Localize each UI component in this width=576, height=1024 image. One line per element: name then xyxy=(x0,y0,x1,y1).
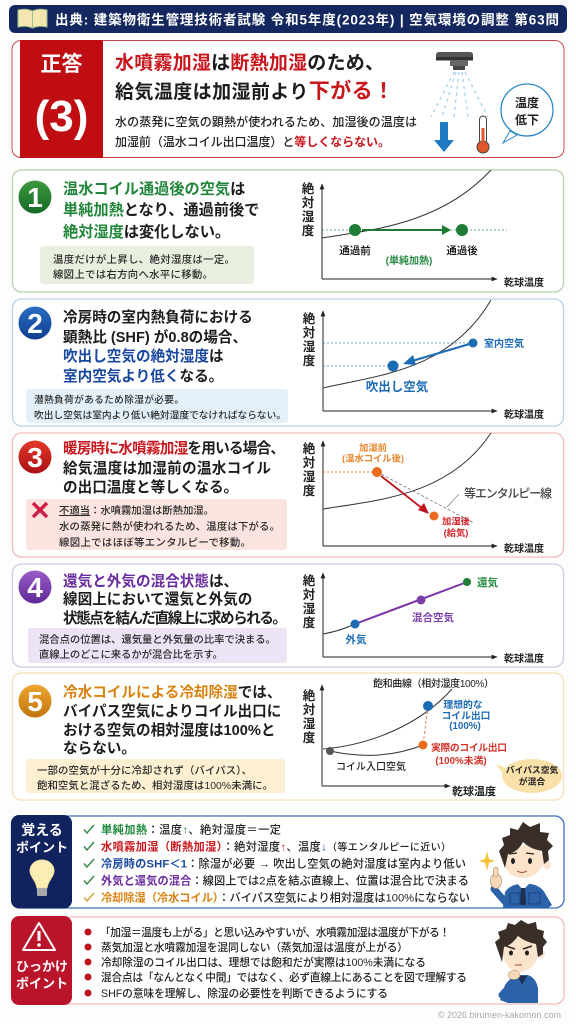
memo checklist: 外気と還気の混合：線図上では2点を結ぶ直線上、位置は混合比で決まる xyxy=(101,874,469,888)
panel 4: mixing xyxy=(12,564,564,667)
chart 5: 乾球温度 xyxy=(452,784,496,798)
number badge 1 xyxy=(18,180,52,214)
panel 5: cooling dehumidification xyxy=(12,673,564,800)
note 4: 直線上のどこに来るかが混合比を示す。 xyxy=(39,648,223,661)
number badge 1: 1 xyxy=(27,182,43,213)
note 1: 温度だけが上昇し、絶対湿度は一定。 xyxy=(53,253,235,266)
panel 3: water spray humidification xyxy=(12,433,564,557)
chart 1: (単純加熱) xyxy=(386,254,432,267)
statement 3: の出口温度と等しくなる。 xyxy=(63,478,238,496)
header bar: source xyxy=(9,5,567,33)
icon: thermometer xyxy=(477,116,489,153)
chart 4: 還気 xyxy=(477,576,498,589)
chart 4: 度 xyxy=(303,615,316,630)
note 5 xyxy=(26,759,285,793)
note 2: 潜熱負荷があるため除湿が必要。 xyxy=(34,393,184,406)
number badge 3 xyxy=(18,440,52,474)
icon: open book xyxy=(18,9,47,28)
chart 3: 絶 xyxy=(303,441,316,456)
chart 2: 対 xyxy=(303,325,316,340)
chart 3: 加湿後 xyxy=(442,516,471,526)
answer headline: 給気温度は加湿前より下がる！ xyxy=(115,79,394,103)
answer explanation xyxy=(115,114,417,149)
trap list xyxy=(84,926,467,1000)
number badge 5 xyxy=(18,684,52,718)
chart 3 xyxy=(303,433,552,555)
statement 2: 顕熱比 (SHF) が0.8の場合、 xyxy=(63,328,247,346)
note 2: 吹出し空気は室内より低い絶対湿度でなければならない。 xyxy=(34,408,286,422)
icon: spray nozzle xyxy=(431,52,488,152)
statement 4: 線図上において還気と外気の xyxy=(63,590,252,608)
callout: bypass air: が混合 xyxy=(519,776,545,786)
character: thumbs-up worker xyxy=(490,822,553,908)
chart 3: 加湿前 xyxy=(359,442,387,453)
statement 1: 温水コイル通過後の空気は xyxy=(63,180,245,198)
panel: answer xyxy=(12,40,564,158)
note 5: 一部の空気が十分に冷却されず（バイパス）、 xyxy=(37,764,252,777)
panel 1: simple heating xyxy=(12,170,564,292)
callout: temperature drop: 低下 xyxy=(515,112,539,127)
chart 5: コイル入口空気 xyxy=(336,760,406,773)
chart 2: 度 xyxy=(303,353,316,368)
note 4 xyxy=(28,628,287,663)
chart 3: (温水コイル後) xyxy=(342,452,404,464)
statement 2: 吹出し空気の絶対湿度は xyxy=(63,347,224,365)
character: thinking worker xyxy=(495,920,547,1003)
memo label: ポイント xyxy=(16,840,68,855)
statement 2 xyxy=(63,308,253,385)
statement 5: 冷水コイルによる冷却除湿では、 xyxy=(63,684,282,701)
number badge 2: 2 xyxy=(27,308,43,339)
answer explanation: 水の蒸発に空気の顕熱が使われるため、加湿後の温度は xyxy=(115,114,417,129)
chart 2: 絶 xyxy=(303,311,316,326)
statement 5: バイパス空気によりコイル出口に xyxy=(63,702,281,720)
note 3: 不適当：水噴霧加湿は断熱加湿。 xyxy=(59,504,214,517)
trap list: 蒸気加湿と水噴霧加湿を混同しない（蒸気加湿は温度が上がる） xyxy=(101,941,408,954)
chart 1: 湿 xyxy=(302,209,315,224)
note 1 xyxy=(40,246,254,284)
statement 4 xyxy=(63,572,287,627)
memo checklist: 水噴霧加湿（断熱加湿）：絶対湿度↑、温度↓（等エンタルピーに近い） xyxy=(101,840,451,854)
icon: warning triangle xyxy=(23,923,55,950)
trap label xyxy=(11,916,72,1005)
panel: trap points xyxy=(11,916,564,1005)
callout: temperature drop: 温度 xyxy=(515,95,539,110)
answer headline: 水噴霧加湿は断熱加湿のため、 xyxy=(115,52,384,74)
callout: bypass air: バイパス空気 xyxy=(506,764,559,775)
chart 1: 対 xyxy=(302,195,315,210)
answer badge xyxy=(20,40,103,158)
chart 5: (100%未満) xyxy=(435,754,487,767)
panel 2: SHF xyxy=(12,299,564,426)
panel: points to remember xyxy=(11,815,564,908)
callout: temperature drop xyxy=(501,84,553,143)
number badge 4 xyxy=(18,570,52,604)
answer explanation: 加湿前（温水コイル出口温度）と等しくならない。 xyxy=(115,134,390,149)
chart 3: 湿 xyxy=(303,469,316,484)
chart 1: 通過前 xyxy=(339,244,371,257)
statement 5: ならない。 xyxy=(63,740,136,757)
chart 5 xyxy=(303,677,562,798)
icon: light bulb xyxy=(30,860,54,896)
note 3 xyxy=(26,499,287,550)
chart 5: 対 xyxy=(303,702,316,717)
trap label: ひっかけ xyxy=(16,959,68,974)
chart 3: 等エンタルピー線 xyxy=(464,486,552,500)
icon: cross xyxy=(33,503,47,517)
chart 1 xyxy=(302,170,544,289)
chart 5: 飽和曲線（相対湿度100%） xyxy=(373,677,494,690)
statement 2: 冷房時の室内熱負荷における xyxy=(63,308,253,326)
trap list: 冷却除湿のコイル出口は、理想では飽和だが実際は100%未満になる xyxy=(101,956,426,969)
number badge 3: 3 xyxy=(27,442,43,473)
header text: 出典: 建築物衛生管理技術者試験 令和5年度(2023年) | 空気環境の調整 第63問 xyxy=(55,12,559,28)
chart 5: 実際のコイル出口 xyxy=(431,741,507,754)
statement 3 xyxy=(63,439,285,496)
statement 2: 室内空気より低くなる。 xyxy=(63,367,223,385)
chart 3: 度 xyxy=(303,483,316,498)
chart 1: 乾球温度 xyxy=(504,276,544,289)
copyright: © 2026 birumen-kakomon.com xyxy=(438,1010,561,1020)
callout: bypass air xyxy=(496,759,562,793)
statement 3: 給気温度は加湿前の温水コイル xyxy=(63,459,271,477)
memo checklist xyxy=(84,822,470,904)
trap list: 「加湿＝温度も上がる」と思い込みやすいが、水噴霧加湿は温度が下がる！ xyxy=(100,926,450,939)
chart 4: 混合空気 xyxy=(412,611,454,624)
trap label: ポイント xyxy=(16,976,68,991)
chart 4: 対 xyxy=(303,587,316,602)
chart 5: 理想的な xyxy=(443,698,483,711)
number badge 5: 5 xyxy=(27,686,43,717)
chart 1: 絶 xyxy=(302,181,315,196)
memo checklist: 冷却除湿（冷水コイル）：バイパス空気により相対湿度は100%にならない xyxy=(101,890,470,904)
note 1: 線図上では右方向へ水平に移動。 xyxy=(53,268,213,281)
statement 1 xyxy=(63,180,259,241)
chart 2: 乾球温度 xyxy=(504,408,544,421)
statement 4: 状態点を結んだ直線上に求められる。 xyxy=(63,609,287,627)
chart 4: 外気 xyxy=(346,633,367,646)
chart 5: 絶 xyxy=(303,688,316,703)
chart 2 xyxy=(303,300,544,421)
statement 3: 暖房時に水噴霧加湿を用いる場合、 xyxy=(63,439,285,457)
chart 2: 湿 xyxy=(303,339,316,354)
statement 4: 還気と外気の混合状態は、 xyxy=(63,572,238,590)
answer badge: 正答 xyxy=(40,52,82,76)
chart 3: 乾球温度 xyxy=(504,542,544,555)
chart 1: 通過後 xyxy=(446,244,478,257)
statement 5: おける空気の相対湿度は100%と xyxy=(63,721,275,739)
chart 1: 度 xyxy=(302,223,315,238)
chart 4: 絶 xyxy=(303,573,316,588)
icon: sparkle xyxy=(479,851,495,871)
note 3: 水の蒸発に熱が使われるため、温度は下がる。 xyxy=(59,520,280,533)
answer badge: (3) xyxy=(35,92,88,141)
answer headline xyxy=(115,52,394,103)
chart 5: コイル出口 xyxy=(442,709,490,722)
chart 4 xyxy=(303,573,544,665)
note 3: 線図上ではほぼ等エンタルピーで移動。 xyxy=(59,536,251,549)
note 5: 飽和空気と混ざるため、相対湿度は100%未満に。 xyxy=(37,779,273,792)
statement 1: 絶対湿度は変化しない。 xyxy=(63,223,230,241)
chart 3: 対 xyxy=(303,455,316,470)
statement 1: 単純加熱となり、通過前後で xyxy=(63,201,259,219)
chart 5: (100%) xyxy=(449,721,481,732)
memo label xyxy=(11,815,72,908)
chart 5: 湿 xyxy=(303,716,316,731)
chart 4: 湿 xyxy=(303,601,316,616)
note 4: 混合点の位置は、還気量と外気量の比率で決まる。 xyxy=(39,633,276,646)
chart 2: 吹出し空気 xyxy=(366,379,429,394)
chart 2: 室内空気 xyxy=(484,337,524,350)
statement 5 xyxy=(63,684,282,757)
chart 5: 度 xyxy=(303,730,316,745)
memo checklist: 単純加熱：温度↑、絶対湿度＝一定 xyxy=(101,822,281,836)
memo checklist: 冷房時のSHF＜1：除湿が必要 → 吹出し空気の絶対湿度は室内より低い xyxy=(101,856,466,870)
trap list: 混合点は「なんとなく中間」ではなく、必ず直線上にあることを図で理解する xyxy=(101,971,467,984)
chart 3: (給気) xyxy=(444,527,468,538)
note 2 xyxy=(26,389,288,423)
trap list: SHFの意味を理解し、除湿の必要性を判断できるようにする xyxy=(101,987,388,1000)
number badge 4: 4 xyxy=(27,572,43,603)
chart 4: 乾球温度 xyxy=(504,652,544,665)
memo label: 覚える xyxy=(21,822,63,838)
number badge 2 xyxy=(18,306,52,340)
